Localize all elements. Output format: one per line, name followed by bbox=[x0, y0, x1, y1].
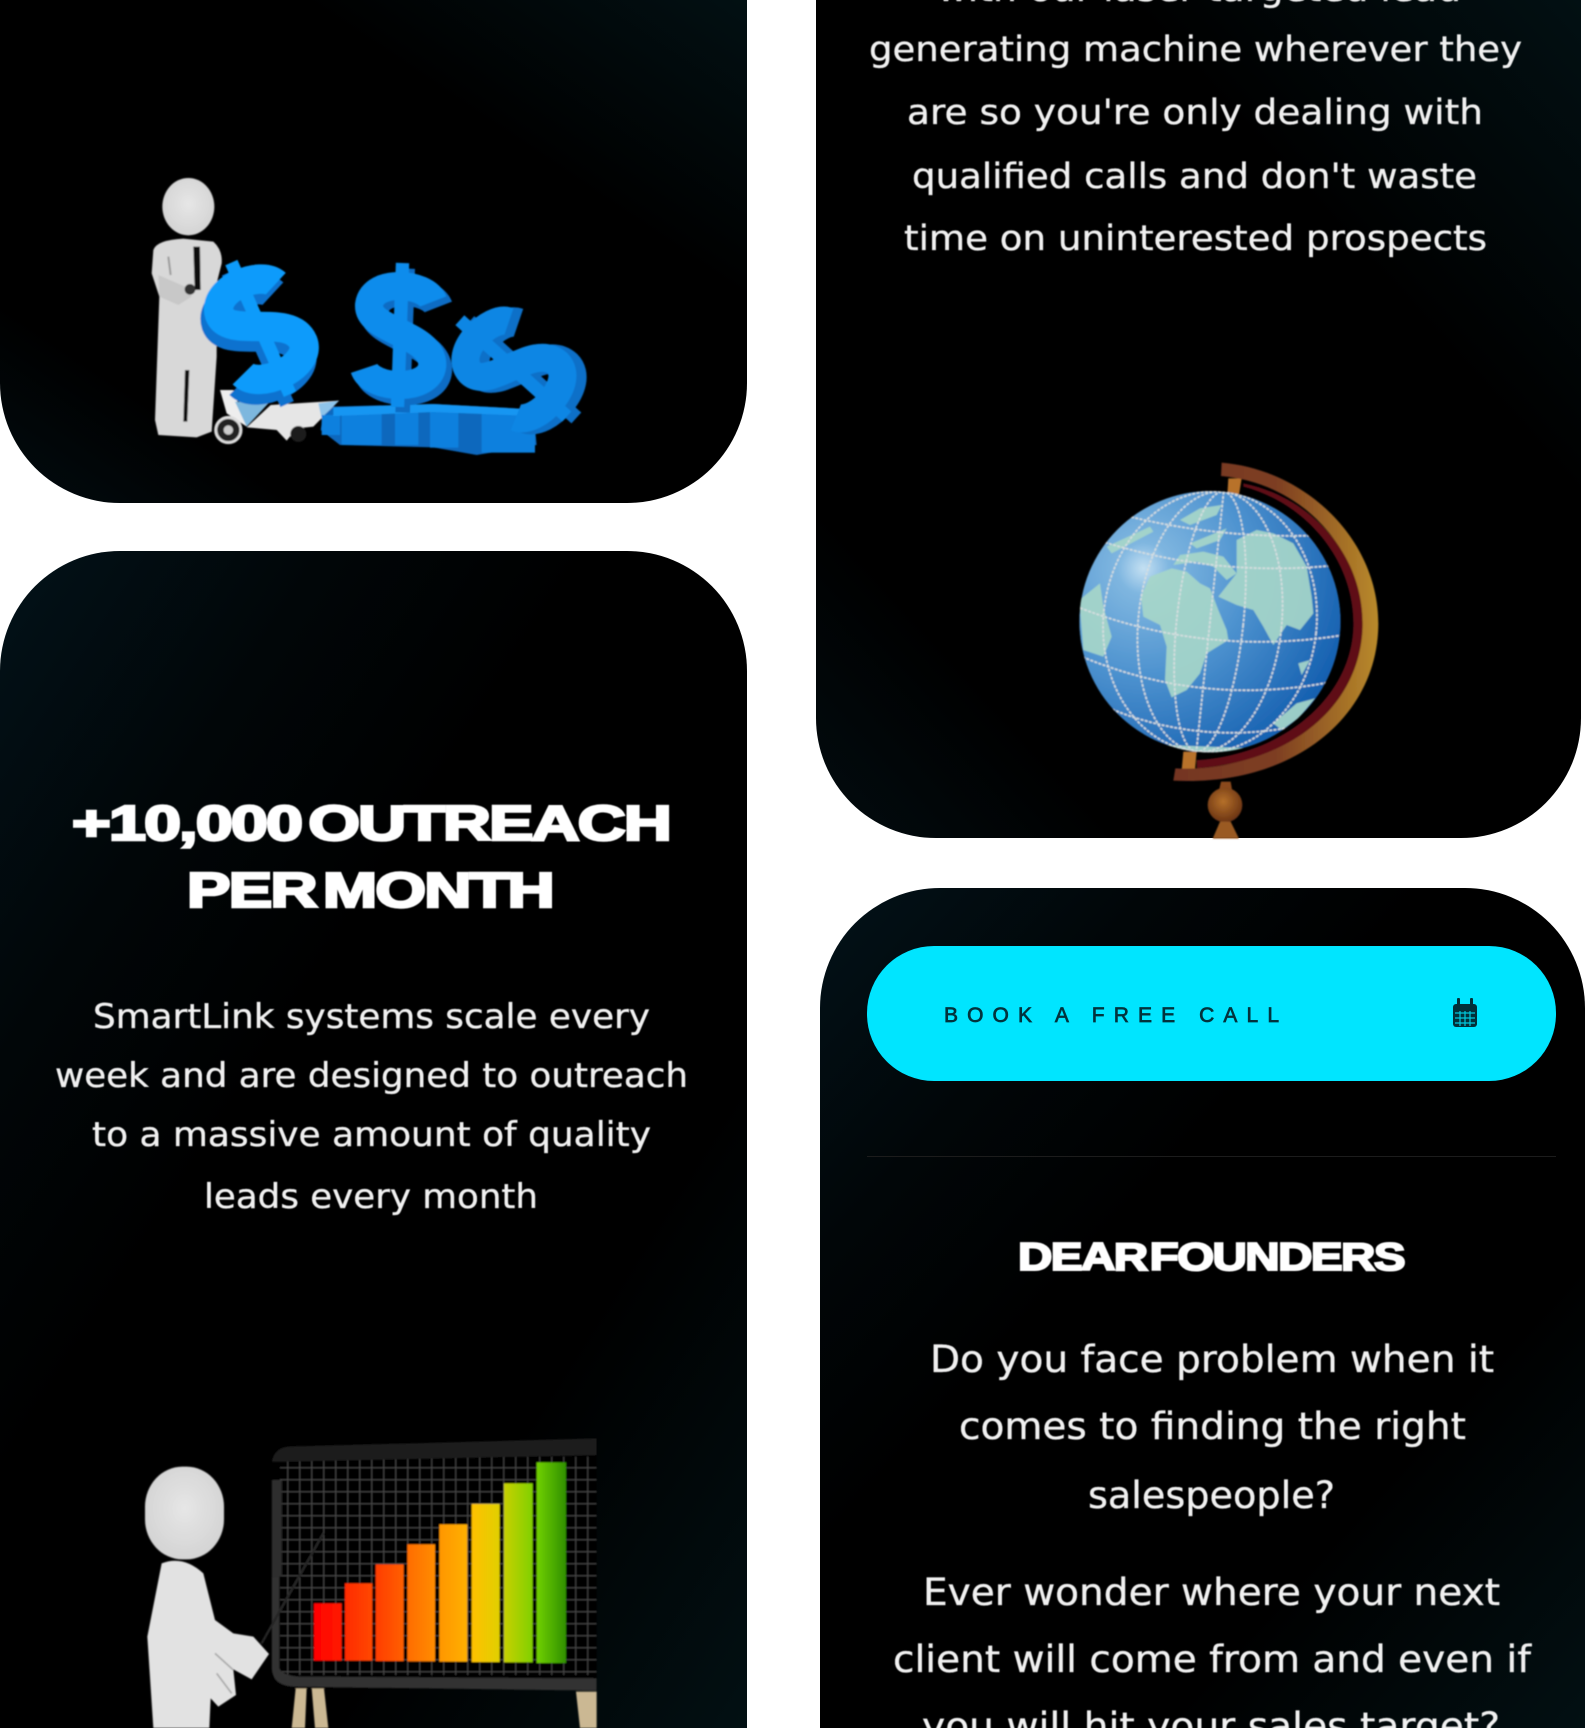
dollar sign 3 bbox=[437, 291, 599, 448]
text block: founders questions: client will come from and even if bbox=[893, 1638, 1532, 1681]
presenter figure bbox=[145, 1467, 269, 1728]
dollar sign 2 bbox=[363, 262, 441, 414]
text block: lead generation description: are so you're only dealing with bbox=[907, 93, 1483, 133]
text block: outreach description: week and are designed to outreach bbox=[55, 1056, 688, 1096]
button: book a free call: BOOK A FREE CALL bbox=[944, 1004, 1279, 1027]
gear bases bbox=[321, 404, 537, 455]
icon: figure pushing dollar signs on a cart bbox=[152, 178, 599, 455]
text block: founders questions: comes to finding the right bbox=[959, 1405, 1466, 1448]
icon: calendar bbox=[1453, 998, 1477, 1027]
text block: outreach description: leads every month bbox=[204, 1177, 538, 1217]
icon: desk globe bbox=[1066, 463, 1378, 839]
panel: cash illustration card bbox=[0, 0, 747, 503]
text block: outreach description bbox=[55, 997, 688, 1217]
globe sphere bbox=[1078, 490, 1342, 754]
heading: +10,000 outreach per month: PER MONTH bbox=[187, 864, 553, 918]
text block: lead generation description: qualified calls and don't waste bbox=[912, 157, 1477, 197]
button: book a free call bbox=[867, 946, 1556, 1081]
text block: founders questions: salespeople? bbox=[1088, 1474, 1335, 1517]
cart bbox=[216, 390, 339, 443]
dollar sign 1 bbox=[194, 249, 324, 418]
heading: dear founders: DEAR FOUNDERS bbox=[1018, 1236, 1404, 1279]
text block: founders questions: Ever wonder where your next bbox=[923, 1571, 1500, 1614]
heading: +10,000 outreach per month bbox=[72, 797, 670, 918]
text block: founders questions bbox=[893, 1338, 1532, 1728]
panel: outreach card bbox=[0, 551, 747, 1728]
panel: founders card bbox=[820, 888, 1585, 1728]
text block: outreach description: to a massive amount of quality bbox=[92, 1115, 651, 1155]
panel: lead generation card bbox=[816, 0, 1581, 839]
globe stand bbox=[1173, 463, 1378, 839]
board legs bbox=[292, 1688, 597, 1728]
chart board bbox=[272, 1438, 600, 1691]
text block: founders questions: Do you face problem when it bbox=[930, 1338, 1494, 1381]
figure bbox=[152, 178, 222, 437]
bar chart bbox=[314, 1462, 566, 1663]
text block: outreach description: SmartLink systems scale every bbox=[93, 997, 650, 1037]
heading: +10,000 outreach per month: +10,000 OUTREACH bbox=[72, 797, 670, 851]
text block: lead generation description: generating machine wherever they bbox=[869, 30, 1522, 70]
text block: lead generation description: time on uninterested prospects bbox=[904, 219, 1487, 259]
text block: lead generation description bbox=[869, 0, 1522, 259]
icon: figure presenting a growth bar chart bbox=[145, 1438, 600, 1728]
